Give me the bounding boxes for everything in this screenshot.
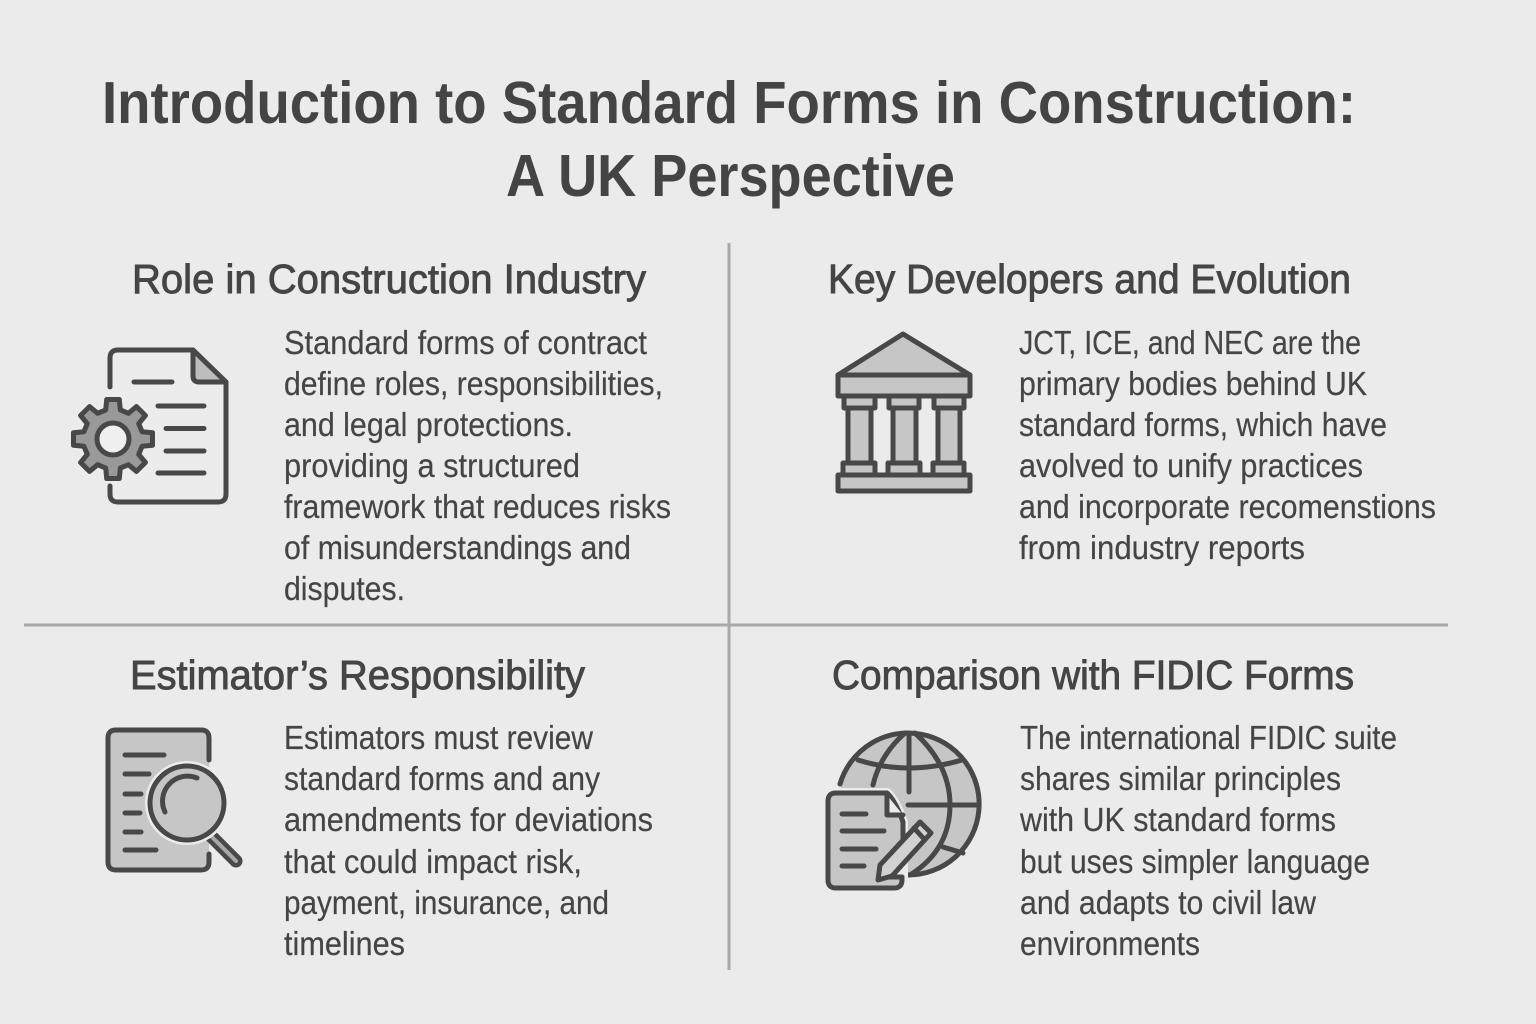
text: FIDIC: with UK standard forms	[1019, 801, 1336, 838]
text: role: framework that reduces risks	[284, 488, 671, 525]
icon: document with magnifying glass	[108, 730, 236, 870]
text: FIDIC: The international FIDIC suite	[1020, 719, 1397, 756]
text: role: define roles, responsibilities,	[284, 365, 663, 402]
heading: developers: Key Developers and Evolution	[828, 256, 1351, 302]
text: developers: JCT, ICE, and NEC are the	[1019, 324, 1361, 361]
text: role	[284, 324, 671, 607]
heading: role: Role in Construction Industry	[132, 256, 646, 302]
text: FIDIC: environments	[1020, 925, 1200, 962]
text: role: Standard forms of contract	[284, 324, 647, 361]
text: role: of misunderstandings and	[284, 529, 631, 566]
text: FIDIC: shares similar principles	[1020, 760, 1341, 797]
text: developers: standard forms, which have	[1019, 406, 1387, 443]
icon: classical building	[838, 334, 970, 491]
text: developers: from industry reports	[1019, 529, 1305, 566]
text: role: disputes.	[284, 570, 405, 607]
title: Introduction to Standard Forms in Construction:	[102, 70, 1356, 136]
text: FIDIC: and adapts to civil law	[1020, 884, 1316, 921]
icon: document with gear	[74, 350, 226, 502]
heading: FIDIC: Comparison with FIDIC Forms	[832, 652, 1354, 698]
text: estimator: amendments for deviations	[284, 801, 653, 838]
text: estimator	[284, 719, 653, 962]
panel: comparison with FIDIC forms	[828, 652, 1397, 962]
panel: estimator's responsibility	[108, 652, 653, 962]
text: developers: primary bodies behind UK	[1019, 365, 1367, 402]
heading: estimator: Estimator’s Responsibility	[130, 652, 585, 698]
text: estimator: Estimators must review	[284, 719, 593, 756]
panel: key developers and evolution	[828, 256, 1436, 566]
text: developers	[1019, 324, 1436, 566]
text: estimator: timelines	[284, 925, 405, 962]
text: estimator: standard forms and any	[284, 760, 600, 797]
text: developers: avolved to unify practices	[1019, 447, 1363, 484]
text: estimator: payment, insurance, and	[284, 884, 609, 921]
text: role: providing a structured	[284, 447, 580, 484]
text: role: and legal protections.	[284, 406, 573, 443]
icon: globe with document and pencil	[828, 733, 979, 888]
text: estimator: that could impact risk,	[284, 843, 582, 880]
text: developers: and incorporate recomenstions	[1019, 488, 1436, 525]
title	[102, 70, 1356, 209]
text: FIDIC: but uses simpler language	[1020, 843, 1370, 880]
text: FIDIC	[1019, 719, 1397, 962]
title: A UK Perspective	[506, 143, 955, 209]
panel: role in construction industry	[74, 256, 671, 607]
